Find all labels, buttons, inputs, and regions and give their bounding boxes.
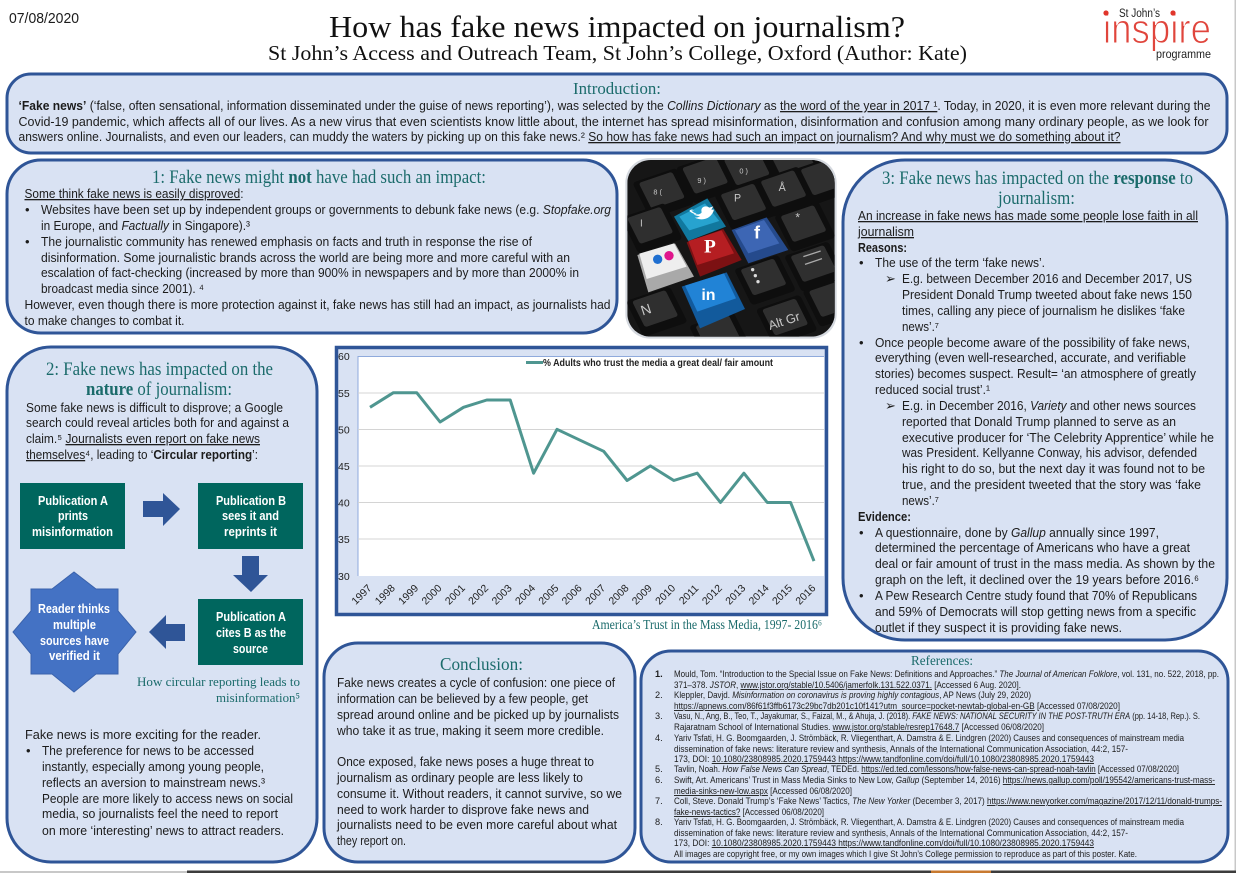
flow box: publication A cites B as the source: cites B as the <box>216 625 286 640</box>
text block: references: 173, DOI: 10.1080/23808985.2020.1759443 https://www.tandfonline.com/doi/full/10.1080/23808985.2020.1759443 <box>674 754 1094 764</box>
star: reader thinks multiple sources have verified it: verified it <box>49 648 101 663</box>
heading: panel 2 <box>46 359 273 400</box>
text block: reasons: Reasons: <box>858 240 907 255</box>
icon: linkedin key: in <box>701 287 716 304</box>
heading: panel 1: 1: Fake news might not have had such an impact: <box>152 167 486 188</box>
caption: chart: America’s Trust in the Mass Media, 1997- 2016⁶ <box>592 617 822 632</box>
title: How has fake news impacted on journalism? <box>329 9 905 44</box>
text block: evidence: graph on the left, it declined over the 19 years before 2016.⁶ <box>875 572 1199 587</box>
x axis labels: 1997 <box>349 582 374 607</box>
date: 07/08/2020 <box>9 10 79 27</box>
text block: references: 5. <box>655 764 663 774</box>
y axis labels: 55 <box>338 388 350 400</box>
text block: fake news is more exciting: People are more likely to access news on social <box>42 791 293 806</box>
x axis labels: 2011 <box>677 583 701 607</box>
text block: references: 7. <box>655 796 663 806</box>
text block: panel 1: • <box>25 202 30 217</box>
text block: evidence: Evidence: <box>858 509 911 524</box>
star: reader thinks multiple sources have verified it: sources have <box>40 633 109 648</box>
text block: references <box>655 669 1222 859</box>
heading: panel 3: journalism: <box>997 188 1075 209</box>
text block: reasons: executive producer for ‘The Celebrity Apprentice’ while he <box>902 430 1214 445</box>
star: reader thinks multiple sources have verified it <box>13 572 136 692</box>
icon: facebook key <box>732 217 788 263</box>
text block: reasons: E.g. in December 2016, Variety and other news sources <box>902 398 1196 413</box>
text block: reasons: stories) becomes suspect. Result= ‘an atmosphere of greatly <box>875 366 1196 381</box>
text block: reasons: his right to do so, but the next day it was found not to be <box>902 461 1205 476</box>
text block: introduction: ‘Fake news’ (‘false, often sensational, information disseminated under the guise of news reporting’), was selected by the Collins Dictionary as the word of the year in 2017 ¹. Today, in 2020, it is even more relevant during the <box>18 98 1210 113</box>
text block: conclusion: journalism as ordinary people are less likely to <box>336 770 583 785</box>
x axis labels: 2005 <box>536 582 561 607</box>
heading: introduction: Introduction: <box>573 79 661 98</box>
text block: panel 1: However, even though there is more protection against it, fake news has still had an impact, as journalists had <box>24 297 610 312</box>
text block: circular reporting intro <box>26 400 290 462</box>
text block: references: All images are copyright free, or my own images which I give St John’s College permission to reproduce as part of this poster. Kate. <box>674 849 1137 859</box>
caption: circular reporting: How circular reporting leads to <box>137 674 300 689</box>
panel: references <box>641 651 1228 862</box>
text block: conclusion <box>336 675 622 848</box>
logo: St John's inspire programme: programme <box>1156 47 1211 61</box>
text block: references: fake-news-tactics? [Accessed 06/08/2020] <box>674 807 824 817</box>
text block: references: 3. <box>655 711 663 721</box>
panel: introduction <box>7 74 1227 153</box>
x axis labels: 2004 <box>513 582 538 607</box>
text block: conclusion: journalists need to be even more careful about what <box>336 817 617 832</box>
text block: references: 173, DOI: 10.1080/23808985.2020.1759443 https://www.tandfonline.com/doi/full/10.1080/23808985.2020.1759443 <box>674 838 1094 848</box>
text block: reasons: President Donald Trump tweeted about fake news 150 <box>902 287 1192 302</box>
text block: reasons: true, and the president tweeted that the story was ‘fake <box>902 477 1201 492</box>
x axis labels: 2016 <box>793 582 818 607</box>
text block: reasons <box>857 208 1214 508</box>
text block: conclusion: need to work harder to disprove fake news and <box>337 802 589 817</box>
flow box: publication B sees it and reprints it: Publication B <box>216 493 286 508</box>
x axis labels: 2012 <box>700 582 725 607</box>
text block: introduction <box>18 98 1210 144</box>
x axis labels: 2009 <box>630 582 655 607</box>
text block: reasons: news’.⁷ <box>902 319 939 334</box>
star: reader thinks multiple sources have verified it: Reader thinks <box>38 601 110 616</box>
flow box: publication B sees it and reprints it <box>198 483 303 549</box>
image: social media keyboard: 8 ( <box>653 187 662 196</box>
panel: 3 fake news has impacted on the response to journalism <box>843 160 1227 640</box>
text block: references: dissemination of fake news: literature review and synthesis, Annals of the International Communication Association, 44:2, 157- <box>674 744 1128 754</box>
icon: facebook key: f <box>754 222 761 242</box>
icon: flickr key <box>637 243 694 292</box>
text block: conclusion: consume it. Without readers, it cannot survive, so we <box>337 786 622 801</box>
text block: references: Tavlin, Noah. How False News Can Spread, TEDEd. https://ed.ted.com/lessons/how-false-news-can-spread-noah-tavlin [Accessed 07/08/2020] <box>674 764 1179 774</box>
heading: references: References: <box>911 653 973 668</box>
image: social media keyboard: Alt Gr <box>767 310 802 333</box>
text block: fake news is more exciting: • <box>26 743 31 758</box>
text block: panel 1: to make changes to combat it. <box>24 313 184 328</box>
text block: references: media-sinks-new-low.aspx [Accessed 06/08/2020] <box>674 786 852 796</box>
data line <box>370 393 814 561</box>
x axis labels: 2013 <box>723 582 748 607</box>
legend: % Adults who trust the media a great deal/ fair amount <box>543 357 773 369</box>
text block: references: Rajaratnam School of International Studies. www.jstor.org/stable/resrep17648.7 [Accessed 06/08/2020] <box>674 722 1044 732</box>
image: social media keyboard: N <box>639 300 653 319</box>
text block: reasons: The use of the term ‘fake news’. <box>875 255 1045 270</box>
text block: reasons: everything (even well-researched, accurate, and verifiable <box>875 350 1186 365</box>
text block: references: 1. <box>655 669 663 679</box>
text block: evidence: deal or fair amount of trust in the mass media. As shown by the <box>875 556 1215 571</box>
x axis labels: 2003 <box>490 582 515 607</box>
caption: circular reporting <box>137 674 300 705</box>
flow box: publication B sees it and reprints it: sees it and <box>222 508 279 523</box>
text block: introduction: Covid-19 pandemic, which affects all of our lives. As a new virus that even scientists know little about, the internet has spread misinformation, disinformation and confusion among many ordinary people, as we look for <box>18 114 1209 129</box>
x axis labels: 2010 <box>653 582 678 607</box>
y axis labels: 45 <box>338 461 350 473</box>
text block: reasons: • <box>859 255 864 270</box>
text block: references: 4. <box>655 733 663 743</box>
text block: references: 2. <box>655 690 663 700</box>
icon: pinterest key <box>687 229 742 277</box>
text block: evidence: A Pew Research Centre study found that 70% of Republicans <box>875 588 1197 603</box>
heading: panel 3 <box>882 168 1193 209</box>
text block: panel 1: in Europe, and Factually in Singapore).³ <box>41 218 251 233</box>
text block: reasons: Once people become aware of the possibility of fake news, <box>875 335 1190 350</box>
panel: conclusion <box>324 643 635 862</box>
heading: panel 2: 2: Fake news has impacted on the <box>46 359 273 380</box>
text block: conclusion: who take it as true, making it seem more credible. <box>336 723 604 738</box>
icon: linkedin key <box>682 272 745 328</box>
image: social media keyboard: P <box>734 193 741 205</box>
text block: reasons: was President. Kellyanne Conway, his advisor, defended <box>901 445 1197 460</box>
text block: conclusion: information can be believed by a few people, get <box>337 691 588 706</box>
x axis labels: 2002 <box>466 582 491 607</box>
text block: reasons: news’.⁷ <box>902 493 939 508</box>
text block: panel 1: disinformation. Some journalistic brands across the world are being more and more careful with an <box>41 250 570 265</box>
text block: evidence: • <box>859 588 864 603</box>
text block: conclusion: Once exposed, fake news poses a huge threat to <box>337 754 594 769</box>
text block: evidence <box>858 509 1215 635</box>
text block: panel 1: Websites have been set up by independent groups or governments to debunk fake news (e.g. Stopfake.org <box>41 202 612 217</box>
text block: reasons: ➢ <box>885 272 896 287</box>
text block: evidence: • <box>859 525 864 540</box>
text block: fake news is more exciting <box>25 727 293 838</box>
text block: panel 1: Some think fake news is easily disproved: <box>24 186 244 201</box>
caption: circular reporting: misinformation⁵ <box>216 690 300 705</box>
x axis labels: 2008 <box>606 582 632 607</box>
text block: circular reporting intro: themselves⁴, leading to ‘Circular reporting’: <box>26 447 258 462</box>
star: reader thinks multiple sources have verified it: multiple <box>53 617 96 632</box>
text block: panel 1: • <box>25 234 30 249</box>
text block: references: https://apnews.com/86f61f3ffb6173c29bc7db201c10f141?utm_source=pocket-newtab-global-en-GB [Accessed 07/08/2020] <box>674 701 1120 711</box>
arrow: B to C <box>233 556 268 592</box>
text block: reasons: E.g. between December 2016 and December 2017, US <box>902 271 1192 286</box>
heading: conclusion: Conclusion: <box>440 654 523 674</box>
text block: reasons: journalism <box>857 224 914 239</box>
flow box: publication A cites B as the source <box>198 599 303 665</box>
heading: panel 2: nature of journalism: <box>86 379 232 400</box>
text block: conclusion: spread around online and be picked up by journalists <box>337 707 619 722</box>
image: social media keyboard: I <box>640 219 643 230</box>
y axis labels: 60 <box>338 351 350 363</box>
arrow: A to B <box>143 493 180 526</box>
text block: panel 1: The journalistic community has renewed emphasis on facts and truth in response the rise of <box>41 234 532 249</box>
text block: reasons: ➢ <box>885 399 896 414</box>
text block: reasons: An increase in fake news has made some people lose faith in all <box>858 208 1198 223</box>
text block: conclusion: they report on. <box>337 833 406 848</box>
text block: references: Vasu, N., Ang, B., Teo, T., Jayakumar, S., Faizal, M., & Ahuja, J. (2018). FAKE NEWS: NATIONAL SECURITY IN THE POST-TRUTH ERA (pp. 14-18, Rep.). S. <box>674 711 1200 721</box>
arrow: C to reader <box>149 615 185 649</box>
text block: panel 1: escalation of fact-checking (increased by more than 900% in newspapers and by more than 2000% in <box>41 265 579 280</box>
x axis labels: 1998 <box>373 582 398 607</box>
text block: references: Swift, Art. Americans’ Trust in Mass Media Sinks to New Low, Gallup (September 14, 2016) https://news.gallup.com/poll/195542/americans-trust-mass- <box>674 775 1215 785</box>
text block: circular reporting intro: search could reveal articles both for and against a <box>26 415 290 430</box>
text block: circular reporting intro: claim.⁵ Journalists even report on fake news <box>26 431 260 446</box>
heading: panel 3: 3: Fake news has impacted on the response to <box>882 168 1193 189</box>
text block: references: Kleppler, Davjd. Misinformation on coronavirus is proving highly contagious, AP News (July 29, 2020) <box>674 690 1031 700</box>
y axis labels: 35 <box>338 534 350 546</box>
image: social media keyboard: 9 ) <box>697 176 706 185</box>
text block: evidence: determined the percentage of Americans who have a great <box>875 540 1190 555</box>
text block: fake news is more exciting: The preference for news to be accessed <box>42 743 254 758</box>
text block: fake news is more exciting: media, so journalists feel the need to report <box>42 806 278 821</box>
text block: fake news is more exciting: on more ‘interesting’ news to attract readers. <box>42 823 284 838</box>
image: social media keyboard <box>625 158 837 339</box>
text block: evidence: outlet if they suspect it is providing fake news. <box>875 620 1122 635</box>
text block: evidence: and 59% of Democrats will stop getting news from a specific <box>875 604 1196 619</box>
text block: references: Coll, Steve. Donald Trump’s ‘Fake News’ Tactics, The New Yorker (December 3, 2017) https://www.newyorker.com/magazine/2017/12/11/donald-trumps- <box>674 796 1222 806</box>
flow box: publication A prints misinformation: misinformation <box>32 524 113 539</box>
y axis labels: 50 <box>338 424 350 436</box>
y axis labels: 30 <box>338 571 350 583</box>
text block: circular reporting intro: Some fake news is difficult to disprove; a Google <box>26 400 283 415</box>
text block: conclusion: Fake news creates a cycle of confusion: one piece of <box>337 675 615 690</box>
x axis labels: 2001 <box>443 582 468 607</box>
text block: panel 1 <box>24 186 612 328</box>
flow box: publication A prints misinformation: Publication A <box>38 493 109 508</box>
text block: fake news is more exciting: Fake news is more exciting for the reader. <box>25 727 261 742</box>
image: social media keyboard: Å <box>779 181 787 194</box>
text block: reasons: times, calling any piece of journalism he dislikes ‘fake <box>902 303 1185 318</box>
text block: reasons: reported that Donald Trump planned to serve as an <box>902 414 1176 429</box>
image: social media keyboard: * <box>795 211 800 225</box>
x axis labels: 1999 <box>396 582 421 607</box>
x axis labels: 2007 <box>583 582 608 607</box>
text block: fake news is more exciting: instantly, especially among young people, <box>42 759 264 774</box>
flow box: publication A cites B as the source: Publication A <box>216 609 287 624</box>
text block: references: 371–378. JSTOR, www.jstor.org/stable/10.5406/jamerfolk.131.522.0371. [Accessed 6 Aug. 2020]. <box>674 680 1021 690</box>
logo: St John's inspire programme: St John’s <box>1119 8 1160 20</box>
text block: references: 8. <box>655 817 663 827</box>
x axis labels: 2014 <box>747 582 772 607</box>
flow box: publication A cites B as the source: source <box>233 641 268 656</box>
text block: references: 6. <box>655 775 663 785</box>
text block: reasons: reduced social trust’.¹ <box>875 382 991 397</box>
text block: fake news is more exciting: reflects an aversion to mainstream news.³ <box>42 775 266 790</box>
icon: twitter key <box>674 198 726 241</box>
panel: 1 fake news might not have had such an impact <box>7 160 617 333</box>
text block: references: Mould, Tom. “Introduction to the Special Issue on Fake News: Definitions and Approaches.” The Journal of American Folklore, vol. 131, no. 522, 2018, pp. <box>674 669 1219 679</box>
text block: panel 1: broadcast media since 2001). ⁴ <box>41 281 204 296</box>
y axis labels: 40 <box>338 498 350 510</box>
line chart: trust in mass media 1997-2016 <box>336 348 826 614</box>
text block: evidence: A questionnaire, done by Gallup annually since 1997, <box>875 525 1159 540</box>
icon: pinterest key: P <box>704 236 716 257</box>
x axis labels: 2000 <box>419 582 445 607</box>
text block: introduction: answers online. Journalists, and even our leaders, can muddy the waters by picking up on this fake news.² So how has fake news had such an impact on journalism? And why must we do something about it? <box>18 129 1120 144</box>
flow box: publication A prints misinformation <box>20 483 125 549</box>
subtitle: St John’s Access and Outreach Team, St John’s College, Oxford (Author: Kate) <box>268 41 967 65</box>
image: social media keyboard: 0 ) <box>739 166 748 175</box>
x axis labels: 2006 <box>560 582 585 607</box>
y axis labels <box>338 351 350 583</box>
text block: reasons: • <box>859 335 864 350</box>
flow box: publication A prints misinformation: prints <box>58 508 88 523</box>
flow box: publication B sees it and reprints it: reprints it <box>224 524 278 539</box>
x axis labels: 2015 <box>770 582 795 607</box>
x axis labels <box>349 582 818 607</box>
logo: St John's inspire programme: inspire <box>1103 5 1211 52</box>
text block: references: dissemination of fake news: literature review and synthesis, Annals of the International Communication Association, 44:2, 157- <box>674 828 1128 838</box>
panel: 2 fake news has impacted on the nature of journalism <box>7 347 317 862</box>
